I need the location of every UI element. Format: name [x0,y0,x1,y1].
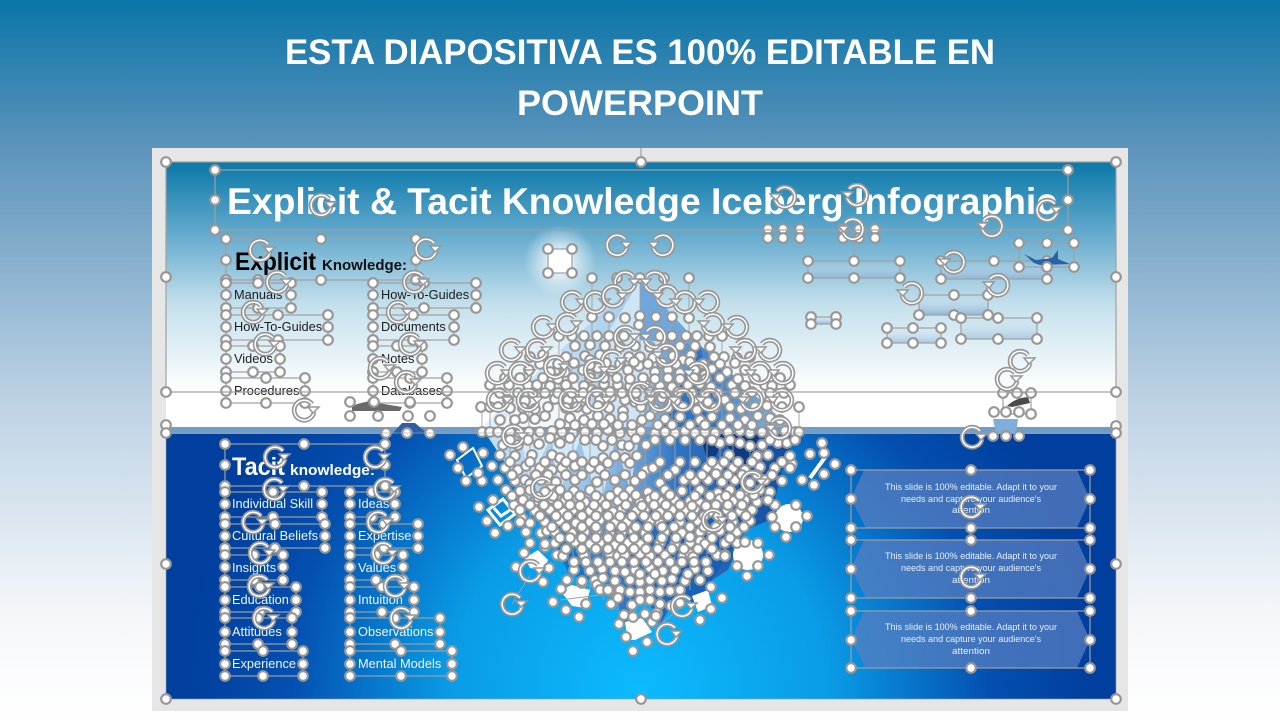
item: Values: Values [358,560,396,575]
callout 2: attention [952,575,990,585]
heading: tacit knowledge: Tacit [232,453,286,481]
item: Intuition: Intuition [358,592,403,607]
item: Procedures [226,378,305,403]
clouds and plane decoration [768,229,1047,343]
item: How-To-Guides left: How-To-Guides [234,319,322,334]
item: Ideas: Ideas [358,496,389,511]
item: Databases [373,378,447,403]
item: Values [350,555,403,580]
item: Mental Models [350,651,452,676]
item: Notes: Notes [381,351,414,366]
item: Cultural Beliefs: Cultural Beliefs [232,528,318,543]
slide group selection outlines [166,148,1116,699]
item: Observations [350,618,440,644]
item: Videos: Videos [234,351,273,366]
heading: tacit knowledge [225,444,385,486]
iceberg below water [486,434,795,625]
item: Manuals [226,283,291,308]
item: Videos [226,346,280,372]
selection handles over the iceberg [481,278,799,617]
item: Insights [225,555,283,580]
item: Education [225,587,296,612]
item: How-To-Guides right [373,283,476,308]
list: tacit knowledge items [225,492,452,676]
item: How-To-Guides right: How-To-Guides [381,287,469,302]
heading: explicit knowledge: Explicit [235,248,317,276]
item: Insights: Insights [232,560,276,575]
item: Procedures: Procedures [234,383,299,398]
main heading: POWERPOINT [517,84,763,123]
callouts: hexagon text boxes [851,470,1090,668]
item: Experience [225,651,303,676]
callout 3 [851,611,1090,668]
item: Experience: Experience [232,656,296,671]
icon: plane [1019,243,1074,267]
heading: tacit knowledge: knowledge: [290,462,375,479]
icon: person at bottom [619,613,657,651]
item: Intuition [350,587,414,612]
icon: sun [524,225,596,297]
item: Expertise [350,524,418,548]
item: Databases: Databases [381,383,442,398]
item: How-To-Guides left [226,315,328,340]
water line band [166,427,1116,434]
item: Ideas [350,492,395,517]
heading: explicit knowledge [226,239,416,280]
icon: white blob [725,540,769,576]
panel: slide screenshot frame [152,148,1128,711]
callout 1: This slide is 100% editable. Adapt it to your [885,482,1057,492]
callout 1 [851,470,1090,528]
callout 1: needs and capture your audience's [901,494,1041,504]
icon: tablet [450,447,492,481]
iceberg above water [482,280,790,427]
item: Education: Education [232,592,289,607]
main heading: ESTA DIAPOSITIVA ES 100% EDITABLE EN [285,33,995,72]
heading: explicit knowledge: Knowledge: [322,257,407,274]
item: Manuals: Manuals [234,287,282,302]
item: Attitudes [225,618,292,644]
sky panel [166,162,1116,427]
callout 2: This slide is 100% editable. Adapt it to your [885,551,1057,561]
icon: right dark cloud and ship [993,393,1031,436]
callout 2 [851,540,1090,598]
iceberg guide lines [482,278,799,625]
icon: white blob upper [772,504,807,537]
callout 1: attention [952,505,990,515]
extra dense handles over the iceberg core [500,345,784,425]
icon: pencil [792,443,835,485]
icon: check badge [479,499,522,533]
item: Expertise: Expertise [358,528,411,543]
icon: person [516,547,549,582]
rotation handles on text boxes [243,185,1062,628]
slide title [215,170,1068,230]
item: Attitudes: Attitudes [232,624,282,639]
callout 3: This slide is 100% editable. Adapt it to your [885,622,1057,632]
icon group around the iceberg [450,443,835,651]
item: Individual Skill: Individual Skill [232,496,313,511]
main heading [285,33,995,123]
callout 3: attention [952,646,990,656]
icon: tools [680,587,722,620]
iceberg rotation handles [487,235,793,644]
item: Individual Skill [225,492,322,517]
item: Documents [373,315,454,340]
callout 3: needs and capture your audience's [901,634,1041,644]
item: Mental Models: Mental Models [358,656,441,671]
sea panel [166,434,1116,699]
icon: left dark cloud and ship [350,402,430,434]
item: Documents: Documents [381,319,446,334]
item: Observations: Observations [358,624,433,639]
slide title: Explicit & Tacit Knowledge Iceberg Infographic [227,181,1057,222]
item: Cultural Beliefs [225,524,325,548]
list: explicit knowledge items [226,283,476,403]
item: Notes [373,346,422,372]
callout 2: needs and capture your audience's [901,563,1041,573]
icon: person with desk [553,583,590,617]
